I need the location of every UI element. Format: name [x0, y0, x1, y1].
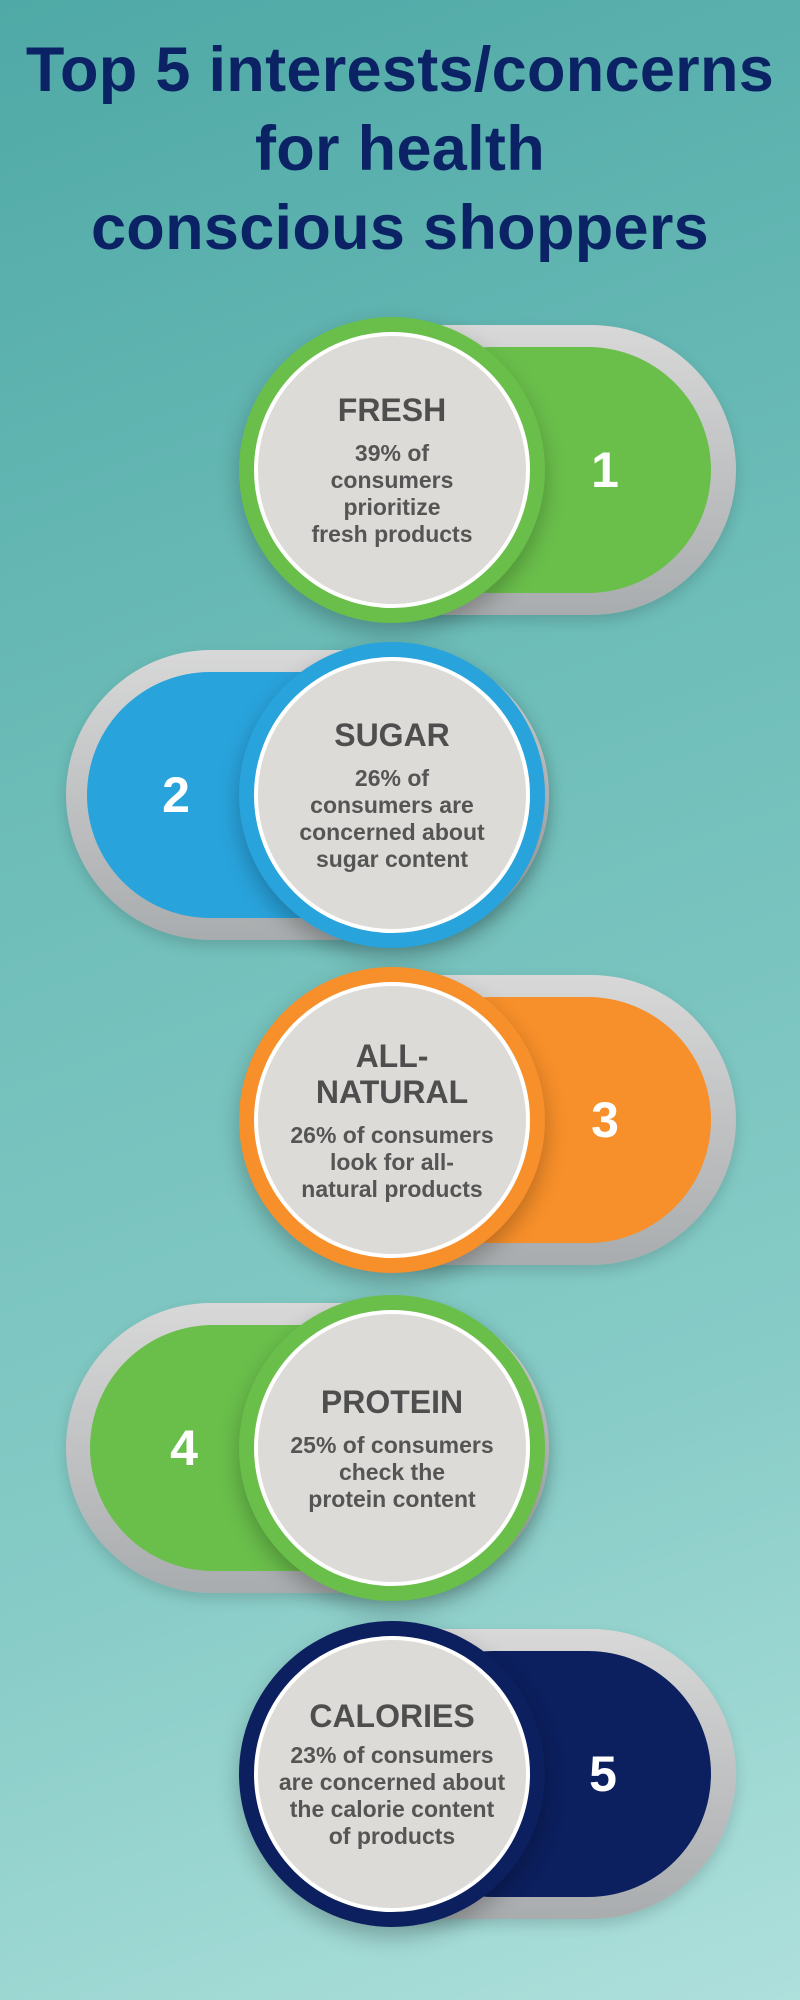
title — [26, 35, 774, 263]
number 4: 4 — [170, 1420, 198, 1476]
title: conscious shoppers — [91, 193, 709, 263]
pill — [90, 1325, 430, 1571]
panel: 4 protein — [62, 1295, 558, 1621]
circle: 26% of consumers — [290, 1122, 494, 1148]
shell — [66, 650, 549, 940]
shell — [66, 1303, 549, 1593]
circle: 25% of consumers — [290, 1432, 494, 1458]
shell — [300, 1629, 736, 1919]
circle: check the — [339, 1458, 445, 1484]
circle — [239, 967, 545, 1273]
circle: are concerned about — [279, 1769, 505, 1795]
circle: ALL- — [356, 1038, 428, 1074]
panel: 1 fresh — [230, 317, 740, 642]
circle: consumers — [331, 467, 453, 493]
title: Top 5 interests/concerns — [26, 35, 774, 105]
circle — [239, 1621, 545, 1927]
circle: of products — [329, 1823, 455, 1849]
circle: CALORIES — [309, 1698, 475, 1734]
panel: 5 calories — [228, 1621, 740, 1948]
number 5: 5 — [589, 1746, 617, 1802]
shell — [300, 975, 736, 1265]
pill — [370, 997, 711, 1243]
circle: NATURAL — [316, 1074, 468, 1110]
circle: natural products — [301, 1176, 483, 1202]
circle: prioritize — [343, 494, 441, 520]
circle: consumers are — [310, 792, 474, 818]
circle: 23% of consumers — [290, 1742, 494, 1768]
circle: concerned about — [299, 819, 485, 845]
circle: the calorie content — [290, 1796, 494, 1822]
pill — [87, 672, 427, 918]
pill — [370, 1651, 711, 1897]
title: for health — [255, 114, 545, 184]
circle: 26% of — [355, 765, 429, 791]
number 2: 2 — [162, 767, 190, 823]
circle: sugar content — [316, 846, 468, 872]
circle — [239, 317, 545, 623]
circle: look for all- — [330, 1148, 454, 1174]
circle — [239, 1295, 545, 1601]
circle: 39% of — [355, 440, 429, 466]
pill — [370, 347, 711, 593]
circle — [239, 642, 545, 948]
number 3: 3 — [591, 1092, 619, 1148]
circle: PROTEIN — [321, 1384, 463, 1420]
panel: 2 sugar — [62, 642, 558, 968]
circle: protein content — [308, 1486, 476, 1512]
circle: SUGAR — [334, 717, 450, 753]
number 1: 1 — [591, 442, 619, 498]
shell — [300, 325, 736, 615]
circle: fresh products — [311, 521, 473, 547]
panel: 3 all-natural — [229, 967, 740, 1293]
circle: FRESH — [338, 392, 446, 428]
